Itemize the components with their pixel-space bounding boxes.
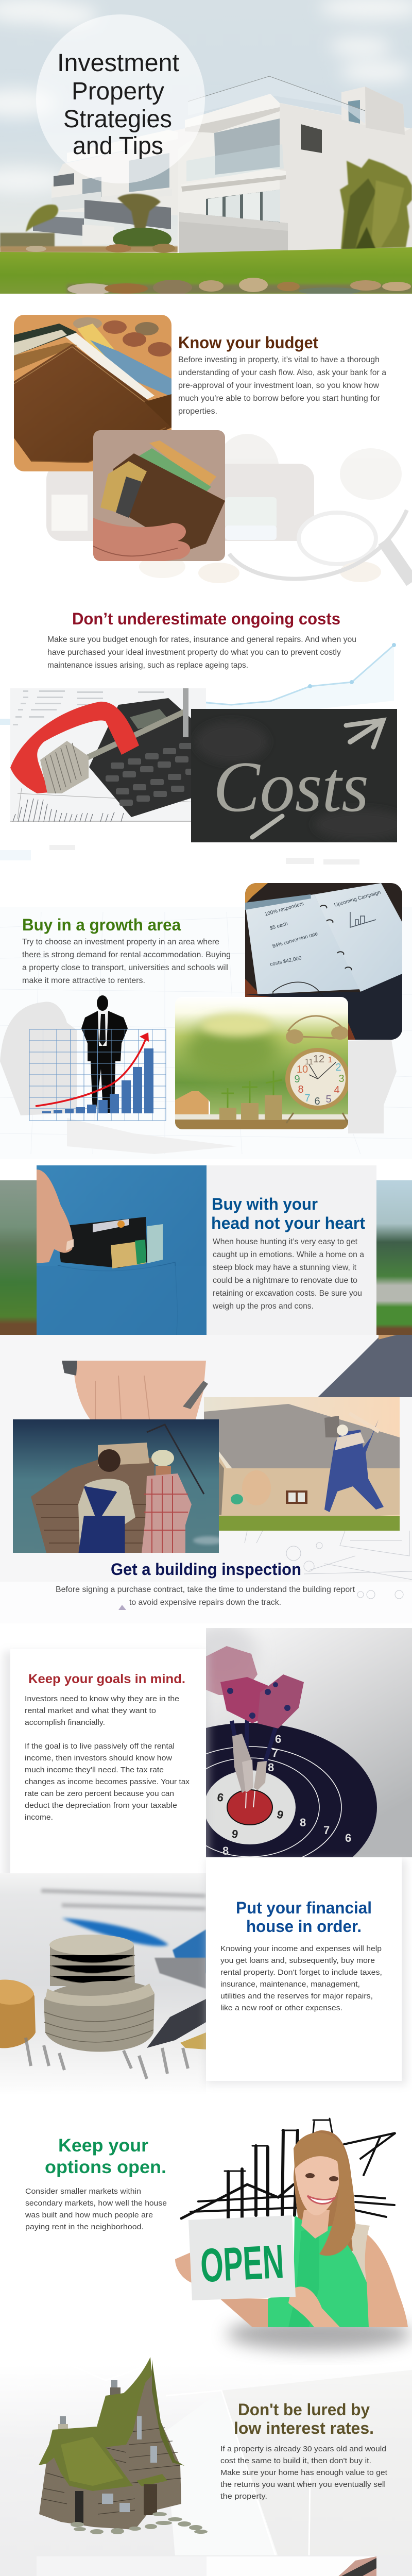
text panel [207,1165,376,1361]
heading: Know your budget [178,333,318,352]
heading: Buy with your [212,1195,318,1213]
heading: low interest rates. [234,2419,374,2437]
pen [330,2558,376,2576]
jumping builder [324,1419,384,1512]
shadow under woman [227,2317,412,2350]
body text [22,938,231,985]
stepping stones [71,2512,208,2534]
notebook handwriting: 100% responders [264,901,304,918]
text panel [206,1857,407,2084]
body text [178,355,386,416]
dartboard: 9 [216,1790,225,1804]
body text: much income they'll need. The tax rate [25,1766,164,1774]
paper text strokes [26,2038,188,2079]
alarm clock: 12 [313,1054,324,1065]
body text: secondary markets, how well the house [25,2199,167,2208]
body text: weigh up the pros and cons. [212,1302,314,1311]
body text [47,635,356,670]
body text: the property. [220,2493,267,2501]
body text [220,1945,382,2012]
body text [25,1695,190,1822]
body text: If the goal is to live passively off the rental [25,1742,175,1751]
faint coins and magnifier background [46,434,412,583]
photo: two builders viewing construction [13,1419,224,1553]
photo: campaign notebook [245,883,402,1040]
alarm clock: 2 [335,1062,341,1073]
body text: paying rent in the neighborhood. [25,2223,144,2231]
shoulder and arm [335,2226,408,2327]
body text: Make sure your home has enough value to get [220,2469,387,2477]
body text: deduct the depreciation from your taxable [25,1802,177,1810]
builder in plaid with hard hat [142,1450,192,1553]
alarm clock: 10 [297,1064,308,1075]
body text [212,1238,364,1311]
fingers [37,1170,73,1263]
neck and face [301,2210,330,2239]
dartboard: 9 [276,1808,285,1822]
lower sections canvas [0,2555,412,2576]
foreground rocks [67,278,412,295]
wallet [57,1217,147,1268]
body text: have purchased your ideal investment property do what you can to prevent costly [47,648,341,657]
chart bars [42,1048,153,1113]
top sliver of grey background [0,2555,412,2576]
body text [25,2188,167,2231]
body text: Try to choose an investment property in an area where [22,938,219,946]
heading: Get a building inspection [111,1560,301,1579]
alarm clock: 8 [298,1084,304,1095]
photo: costs chalkboard [191,709,407,842]
body text: a property close to transport, universities and schools will [22,963,229,972]
heading: options open. [45,2157,166,2177]
body text: income. [25,1814,53,1822]
growth curve arrow [36,1038,146,1106]
photo: wallet in shirt pocket [37,1165,207,1335]
heading: Don't be lured by [238,2400,370,2419]
dart barrels [232,1710,281,1808]
gold coin stack [0,1980,36,2048]
title: Investment [57,49,179,77]
dartboard: 7 [272,1747,278,1759]
businessman silhouette [81,995,128,1113]
shirt pocket [58,1262,176,1271]
alarm clock: 5 [325,1094,332,1105]
body text: Investors need to know why they are in the [25,1695,179,1703]
hero sky [0,0,412,252]
clouds [0,0,412,193]
body text: could be a nightmare to renovate due to [213,1276,357,1285]
heading [236,1899,372,1936]
body text: much you’re able to borrow before you start hunting for [178,394,380,403]
section: screen the tenants [0,2555,412,2576]
sign lettering: OPEN [199,2235,285,2292]
text panel [3,1649,209,1880]
body text: was built and how much people are [25,2211,153,2219]
body text [56,1585,355,1607]
section: don't be lured [0,2357,412,2556]
heading: Keep your goals in mind. [28,1672,185,1686]
blurred landscape band left [0,1180,37,1335]
hedges and border rocks [0,228,178,253]
section: keep your goals in mind [3,1623,412,1892]
body text: steep block may have a stunning view, it [213,1263,357,1272]
dartboard: 8 [268,1761,274,1774]
body text: Make sure you budget enough for rates, insurance and general repairs. And when you [47,635,356,644]
section: know your budget [14,315,386,561]
dartboard: 7 [323,1824,330,1837]
photo: coin stacks and pens [0,1873,206,2095]
alarm clock: 9 [294,1074,300,1085]
red clamp [10,702,139,793]
heading: house in order. [246,1917,362,1936]
alarm clock: 11 [305,1058,313,1066]
builder in overalls [78,1449,135,1553]
title [57,49,179,160]
photo: hand signing with keys [207,2556,376,2576]
chalk arrow [252,720,383,837]
heading [234,2400,374,2437]
alarm clock: 4 [334,1084,340,1096]
body text: pre-approval of your investment loan, so you know how [178,381,380,390]
dartboard [123,1723,377,1892]
left background building [25,129,202,236]
title: Strategies [63,106,172,133]
eyes and smile [305,2173,315,2178]
body text: maintenance issues arising, such as replace ageing taps. [47,661,248,670]
photo: clamp squeezing coins on calculator [10,688,206,822]
section: keep your options open [25,2119,412,2350]
photo: wallet on table [14,315,171,471]
silver coin stack upper [50,1935,135,1986]
blueprint lines [245,1531,412,1599]
photo: alarm clock with coins [175,997,350,1129]
green top [268,2215,369,2327]
hair back [294,2130,357,2262]
woman holding open sign [175,2130,408,2327]
title circle [36,14,205,183]
section: buy with your head [0,1165,412,1335]
body text: understanding of your cash flow. Also, ask your bank for a [178,368,386,377]
heading: head not your heart [211,1214,365,1232]
walls [39,2362,181,2530]
door [75,2491,83,2523]
body text: income, then investors should know how [25,1754,173,1762]
body text: make it more attractive to renters. [22,976,145,985]
dartboard: 9 [231,1827,239,1841]
body text: the returns you want when you eventually sell [220,2481,386,2489]
heading [211,1195,365,1232]
alarm clock: 3 [338,1073,345,1084]
chart grid [29,1029,166,1121]
notebook handwriting: Upcoming Campaign [334,890,382,908]
body text: Before signing a purchase contract, take the time to understand the building report [56,1585,355,1594]
mossy roof [39,2357,152,2491]
lawn [0,247,412,294]
body text: caught up in emotions. While a home on a [213,1250,364,1259]
text panel [37,2556,207,2576]
body text: there is strong demand for rental accommodation. Buying [22,951,231,959]
sketch of skyline [181,2119,396,2221]
body text: cost the same to build it, then don't buy it. [220,2457,371,2465]
body text: insurance, maintenance, management, [220,1980,360,1989]
faint grid and silhouettes background [0,907,412,1159]
body text: like a new roof or other expenses. [220,2004,342,2012]
dartboard: 8 [222,1844,229,1857]
main white building [178,76,412,253]
coin stack [40,741,89,793]
palm tree [340,159,412,249]
silver coin stack lower [44,1981,154,2052]
heading: Buy in a growth area [22,916,181,934]
body text: When house hunting it’s very easy to get [213,1238,358,1246]
body text: to avoid expensive repairs down the track. [129,1598,281,1607]
alarm clock: 1 [328,1056,333,1064]
photo: house with jumping builder [204,1397,400,1531]
title: and Tips [73,132,163,160]
body text: you get loans and, subsequently, buy more [220,1957,375,1965]
alarm clock: 7 [304,1093,311,1104]
body text: Consider smaller markets within [25,2188,141,2196]
hands [175,2252,193,2283]
alarm clock [285,1016,350,1123]
notebook handwriting: $5 each [269,921,288,931]
heading: Put your financial [236,1899,372,1917]
dartboard: 6 [275,1733,281,1745]
body text: rental market and what they want to [25,1707,156,1715]
body text: If a property is already 30 years old and would [220,2445,386,2453]
hand [304,2556,376,2576]
background: marble desk with hand and blueprint [0,1335,412,1628]
body text: retaining or excavation costs. Be sure you [213,1289,362,1298]
chalk word: Costs [213,747,369,827]
body text [220,2445,387,2501]
blurred landscape band right [376,1180,412,1335]
body text: Knowing your income and expenses will help [220,1945,382,1953]
body text: rental property. Don't forget to include taxes, [220,1969,382,1977]
dart flights [206,1646,304,1728]
growth chart with businessman [29,995,166,1121]
section: buy in a growth area [22,883,402,1129]
windows [119,2503,130,2512]
section: put your financial house in order [0,1857,407,2095]
chimneys [60,2416,66,2426]
hero section [0,0,412,295]
body text: properties. [178,407,217,416]
body text: Before investing in property, it’s vital to have a thorough [178,355,380,364]
dartboard: 6 [345,1832,351,1844]
screw [87,712,184,758]
notebook handwriting: 84% conversion rate [272,931,319,950]
body text: rate can be zero percent because you can [25,1790,174,1798]
bare arm [219,2298,268,2327]
dartboard: 8 [300,1816,306,1829]
heading [45,2136,166,2177]
open sign [188,2215,296,2300]
body text: utilities and the reserves for major repairs, [220,1992,373,2001]
photo: hand holding wallet [93,430,225,561]
heading: Don’t underestimate ongoing costs [72,609,340,628]
section: ongoing costs [10,609,407,842]
photo: darts in dartboard [123,1623,412,1892]
house with mossy roof [39,2357,208,2534]
section: get a building inspection [0,1335,412,1628]
notebook handwriting [264,890,382,968]
body text: accomplish financially. [25,1719,105,1727]
notebook handwriting: costs $42,000 [269,955,302,968]
title: Property [72,78,164,105]
alarm clock: 6 [314,1096,320,1107]
heading: Keep your [58,2136,148,2156]
calculator [89,698,191,817]
light grey paper background [0,2365,412,2556]
body text: changes as income becomes passive. Your tax [25,1778,190,1786]
faint line chart background [0,643,396,865]
